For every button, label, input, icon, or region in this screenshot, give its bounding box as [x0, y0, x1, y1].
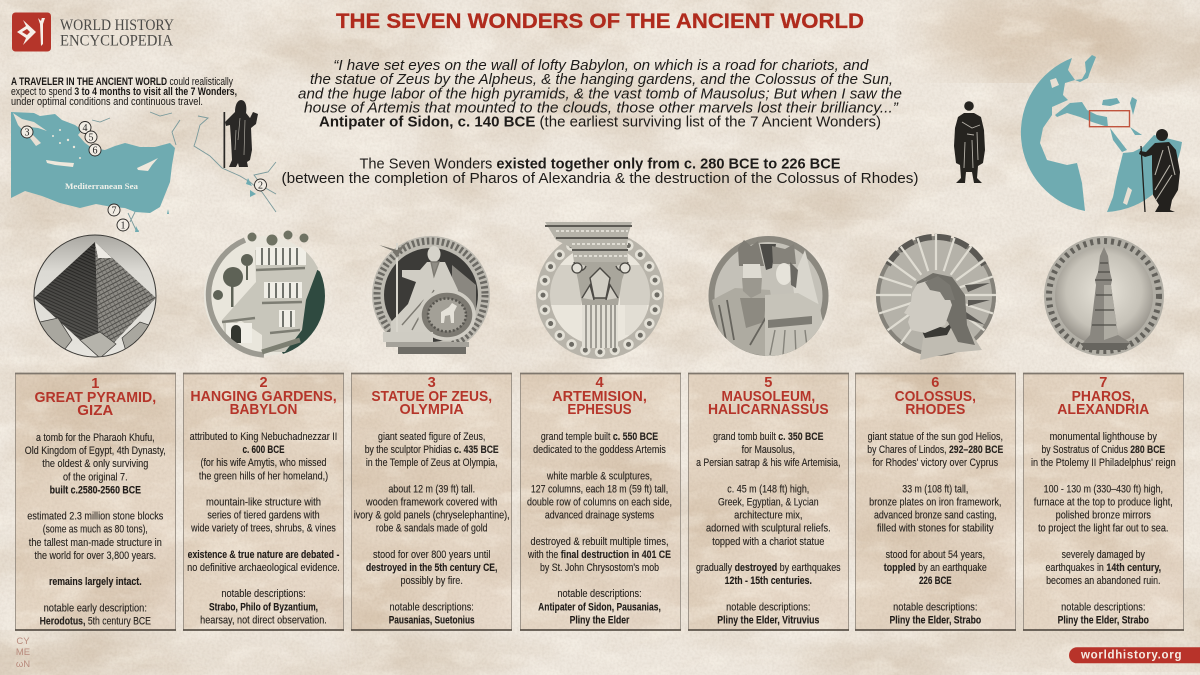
body text: grand tomb built c. 350 BCE — [713, 431, 824, 443]
body text: by Sostratus of Cnidus 280 BCE — [1041, 444, 1165, 456]
sea — [11, 112, 175, 213]
medallion 3: Statue of Zeus — [372, 236, 490, 354]
body text — [867, 431, 1004, 626]
map: eastern Mediterranean: 2 — [258, 180, 263, 192]
heading: 4 — [595, 375, 604, 391]
wonder locators — [21, 122, 266, 231]
radiate crown — [876, 234, 996, 344]
body text: c. 600 BCE — [242, 444, 285, 456]
traveler silhouette — [224, 100, 258, 168]
body text: existence & true nature are debated - — [188, 549, 340, 561]
body text: Old Kingdom of Egypt, 4th Dynasty, — [25, 445, 166, 457]
islands — [46, 129, 158, 171]
body text: Pliny the Elder, Vitruvius — [717, 614, 819, 626]
body text: Herodotus, 5th century BCE — [40, 615, 151, 627]
selected region box — [1090, 111, 1130, 127]
body text: dedicated to the goddess Artemis — [533, 444, 666, 456]
column shaft — [582, 305, 618, 348]
Indian Ocean — [1107, 135, 1182, 212]
woman's head — [772, 244, 796, 264]
body text: Greek, Egyptian, & Lycian — [718, 496, 819, 508]
heading: HALICARNASSUS — [708, 402, 829, 418]
card 1: Great Pyramid — [15, 374, 176, 630]
logo — [12, 12, 174, 52]
heading — [34, 376, 156, 419]
coexistence dates statement — [282, 156, 919, 187]
body text: stood for over 800 years until — [373, 549, 490, 561]
globe — [1021, 55, 1182, 212]
Black Sea and Caspian — [1102, 97, 1137, 115]
map: eastern Mediterranean: 5 — [88, 132, 94, 144]
body text: advanced drainage systems — [545, 510, 654, 522]
body text: of the original 7. — [63, 471, 128, 483]
robed figure with staff — [1139, 129, 1180, 212]
body text: topped with a chariot statue — [712, 536, 824, 548]
body text — [527, 431, 672, 626]
logo wordmark — [60, 17, 174, 49]
heading: 6 — [931, 375, 939, 391]
body text: severely damaged by — [1062, 549, 1145, 561]
body text: by the sculptor Phidias c. 435 BCE — [365, 444, 499, 456]
medallion 7: Pharos — [1044, 236, 1164, 356]
body text: the green hills of her homeland,) — [199, 470, 328, 482]
medallion 6: Colossus — [876, 234, 996, 360]
coexistence dates statement: (between the completion of Pharos of Alexandria & the destruction of the Colossus of Rhodes) — [282, 170, 919, 187]
artist signature: ME — [16, 647, 30, 658]
Greece — [13, 113, 47, 146]
body text — [354, 431, 510, 626]
heading: 5 — [764, 375, 772, 391]
body text: wooden framework covered with — [365, 496, 497, 508]
body text: attributed to King Nebuchadnezzar II — [190, 431, 337, 443]
heading: BABYLON — [230, 402, 297, 418]
sea label: Mediterranean Sea — [65, 181, 139, 191]
body text: Antipater of Sidon, Pausanias, — [538, 601, 661, 613]
body text — [1031, 431, 1176, 626]
artist signature: ωN — [16, 659, 30, 670]
rosette ring — [543, 238, 657, 352]
body text: Pliny the Elder — [570, 614, 630, 626]
body text: 12th - 15th centuries. — [725, 575, 812, 587]
map: eastern Mediterranean: 1 — [120, 220, 126, 232]
body text: architecture mix, — [734, 510, 802, 522]
scepter and eagle — [396, 243, 398, 333]
card 5: Mausoleum — [688, 374, 849, 630]
card frame — [1024, 374, 1184, 630]
heading: GREAT PYRAMID, — [34, 390, 156, 406]
medallion 1: Great Pyramid — [34, 235, 156, 358]
body text: the world for over 3,800 years. — [34, 550, 156, 562]
body text: remains largely intact. — [49, 576, 142, 588]
heading: EPHESUS — [567, 402, 632, 418]
body text: robe & sandals made of gold — [376, 523, 488, 535]
body text: with the final destruction in 401 CE — [527, 549, 671, 561]
body text — [696, 431, 841, 626]
heading — [895, 375, 976, 418]
card 4: Artemision — [520, 374, 681, 630]
body text: notable descriptions: — [1061, 601, 1145, 613]
body text: in the Temple of Zeus at Olympia, — [366, 457, 498, 469]
body text: monumental lighthouse by — [1050, 431, 1157, 443]
body text: wide variety of trees, shrubs, & vines — [190, 523, 336, 535]
logo wordmark: ENCYCLOPEDIA — [60, 32, 174, 49]
map: eastern Mediterranean — [11, 112, 276, 232]
body text: (some as much as 80 tons), — [43, 524, 148, 536]
body text: by Chares of Lindos, 292–280 BCE — [867, 444, 1004, 456]
body text: the oldest & only surviving — [42, 458, 148, 470]
traveler note — [11, 76, 237, 108]
heading: 2 — [259, 375, 268, 391]
map: eastern Mediterranean: 4 — [82, 123, 88, 134]
cards backing — [15, 373, 1183, 630]
hair — [915, 273, 975, 345]
body text: Strabo, Philo of Byzantium, — [209, 601, 318, 613]
body text: toppled by an earthquake — [884, 562, 987, 574]
card frame — [688, 374, 848, 630]
traveler note: under optimal conditions and continuous travel. — [11, 96, 203, 108]
body text: earthquakes in 14th century, — [1045, 562, 1161, 574]
entablature — [545, 222, 632, 262]
heading — [552, 375, 647, 418]
body text — [187, 431, 340, 626]
lighthouse — [1083, 247, 1131, 343]
body text: double row of columns on each side, — [527, 496, 672, 508]
traveler note: expect to spend 3 to 4 months to visit all the 7 Wonders, — [11, 86, 237, 98]
body text: Pausanias, Suetonius — [389, 614, 475, 626]
Mediterranean — [1055, 102, 1108, 127]
body text: adorned with sculptural reliefs. — [706, 523, 831, 535]
shield — [420, 291, 474, 339]
logo wordmark: WORLD HISTORY — [60, 17, 174, 34]
body text: 226 BCE — [919, 575, 952, 587]
body text: polished bronze mirrors — [1056, 510, 1151, 522]
body text: gradually destroyed by earthquakes — [696, 562, 841, 574]
Red Sea and Gulf — [1110, 127, 1142, 152]
heading — [1057, 375, 1150, 418]
heading — [190, 375, 337, 418]
body text: Pliny the Elder, Strabo — [889, 614, 981, 626]
artist signature — [16, 636, 30, 670]
heading: OLYMPIA — [400, 402, 464, 418]
body text: for Rhodes' victory over Cyprus — [872, 457, 998, 469]
body text: c. 45 m (148 ft) high, — [727, 483, 809, 495]
base — [383, 332, 433, 342]
body text: notable early description: — [44, 602, 147, 614]
body text: giant statue of the sun god Helios, — [868, 431, 1003, 443]
body text: a tomb for the Pharaoh Khufu, — [36, 432, 155, 444]
logo mark — [12, 12, 51, 52]
title: THE SEVEN WONDERS OF THE ANCIENT WORLD — [336, 10, 864, 33]
body text: grand temple built c. 550 BCE — [541, 431, 659, 443]
body text: by St. John Chrysostom's mob — [540, 562, 659, 574]
heading: COLOSSUS, — [895, 389, 976, 405]
card 2: Hanging Gardens — [183, 374, 344, 630]
heading: MAUSOLEUM, — [721, 389, 815, 405]
heading: HANGING GARDENS, — [190, 389, 337, 405]
body text: to project the light far out to sea. — [1038, 523, 1168, 535]
body text: stood for about 54 years, — [886, 549, 985, 561]
Mausolus — [712, 288, 771, 356]
medallion 5: Mausoleum — [708, 236, 828, 357]
quote by Antipater — [298, 58, 902, 130]
body text: notable descriptions: — [390, 601, 474, 613]
body text: notable descriptions: — [557, 588, 642, 600]
body text: 33 m (108 ft) tall, — [902, 483, 968, 495]
website pill — [1069, 647, 1200, 663]
heading: 3 — [428, 375, 436, 391]
capital — [574, 262, 628, 305]
face — [904, 280, 952, 333]
body text: becomes an abandoned ruin. — [1046, 575, 1160, 587]
body text: destroyed & rebuilt multiple times, — [530, 536, 668, 548]
card frame — [16, 374, 176, 630]
card 6: Colossus — [855, 374, 1016, 630]
body text: Pliny the Elder, Strabo — [1058, 614, 1149, 626]
body text: notable descriptions: — [726, 601, 810, 613]
body text: mountain-like structure with — [206, 496, 321, 508]
Artemisia — [765, 293, 822, 357]
rivers and coast lines — [92, 112, 276, 231]
card 3: Statue of Zeus — [351, 374, 512, 630]
heading: STATUE OF ZEUS, — [371, 389, 492, 405]
heading: PHAROS, — [1072, 389, 1135, 405]
heading — [371, 375, 492, 418]
map: eastern Mediterranean: 6 — [92, 146, 98, 156]
heading: ALEXANDRIA — [1057, 402, 1150, 418]
body text: built c.2580-2560 BCE — [50, 484, 141, 496]
body text: possibly by fire. — [401, 575, 463, 587]
quote by Antipater: the statue of Zeus by the Alpheus, & the hanging gardens, and the Colossus of the Sun, — [310, 72, 893, 88]
body text — [25, 432, 166, 627]
artist signature: CY — [16, 636, 30, 647]
body text: a Persian satrap & his wife Artemisia, — [696, 457, 840, 469]
body text: ivory & gold panels (chryselephantine), — [354, 510, 510, 522]
body text: white marble & sculptures, — [546, 470, 652, 482]
quote by Antipater: and the huge labor of the high pyramids, & the vast tomb of Mausolus; But when I saw the — [298, 86, 902, 102]
card frame — [520, 374, 680, 630]
medallion 4: Artemision — [543, 222, 657, 352]
body text: filled with stones for stability — [877, 523, 994, 535]
body text: 127 columns, each 18 m (59 ft) tall, — [531, 483, 668, 495]
card 7: Pharos — [1023, 374, 1184, 630]
body text: estimated 2.3 million stone blocks — [27, 511, 164, 523]
body text: bronze plates on iron framework, — [869, 496, 1001, 508]
website pill: worldhistory.org — [1080, 649, 1182, 661]
North Sea and Baltic — [1075, 55, 1096, 82]
British Isles and Madagascar — [1050, 78, 1132, 205]
body text: hearsay, not direct observation. — [200, 614, 327, 626]
quote by Antipater: house of Artemis that mounted to the clouds, those other marvels lost their brilliancy...” — [304, 100, 899, 116]
coexistence dates statement: The Seven Wonders existed together only from c. 280 BCE to 226 BCE — [360, 156, 840, 173]
body text: destroyed in the 5th century CE, — [366, 562, 497, 574]
body text: advanced bronze sand casting, — [874, 510, 997, 522]
Atlantic — [1021, 58, 1085, 211]
body text: (for his wife Amytis, who missed — [200, 457, 326, 469]
card frame — [352, 374, 512, 630]
philosopher silhouette — [954, 101, 985, 183]
body text: notable descriptions: — [221, 588, 306, 600]
man's head — [738, 240, 764, 266]
body text: giant seated figure of Zeus, — [378, 431, 485, 443]
card frame — [856, 374, 1016, 630]
body text: series of tiered gardens with — [207, 510, 320, 522]
heading — [708, 375, 829, 418]
heading: 7 — [1099, 375, 1107, 391]
heading: ARTEMISION, — [552, 389, 647, 405]
heading: RHODES — [905, 402, 966, 418]
card frame — [184, 374, 344, 630]
heading: 1 — [91, 376, 99, 392]
body text: notable descriptions: — [893, 601, 977, 613]
body text: 100 - 130 m (330–430 ft) high, — [1044, 483, 1163, 495]
throne back — [452, 265, 476, 310]
body text: no definitive archaeological evidence. — [187, 562, 340, 574]
quote by Antipater: “I have set eyes on the wall of lofty Babylon, on which is a road for chariots, and — [333, 58, 869, 74]
quote by Antipater: Antipater of Sidon, c. 140 BCE (the earliest surviving list of the 7 Ancient Wonders) — [319, 114, 881, 130]
medallion 2: Hanging Gardens — [204, 230, 325, 358]
neck — [920, 315, 982, 360]
heading: GIZA — [77, 403, 114, 419]
body text: the tallest man-made structure in — [29, 537, 162, 549]
body text: for Mausolus, — [742, 444, 795, 456]
body text: about 12 m (39 ft) tall. — [388, 483, 475, 495]
Zeus figure — [390, 262, 458, 340]
map: eastern Mediterranean: 3 — [24, 128, 30, 138]
map: eastern Mediterranean: 7 — [112, 206, 116, 216]
traveler note: A TRAVELER IN THE ANCIENT WORLD could realistically — [11, 76, 233, 88]
